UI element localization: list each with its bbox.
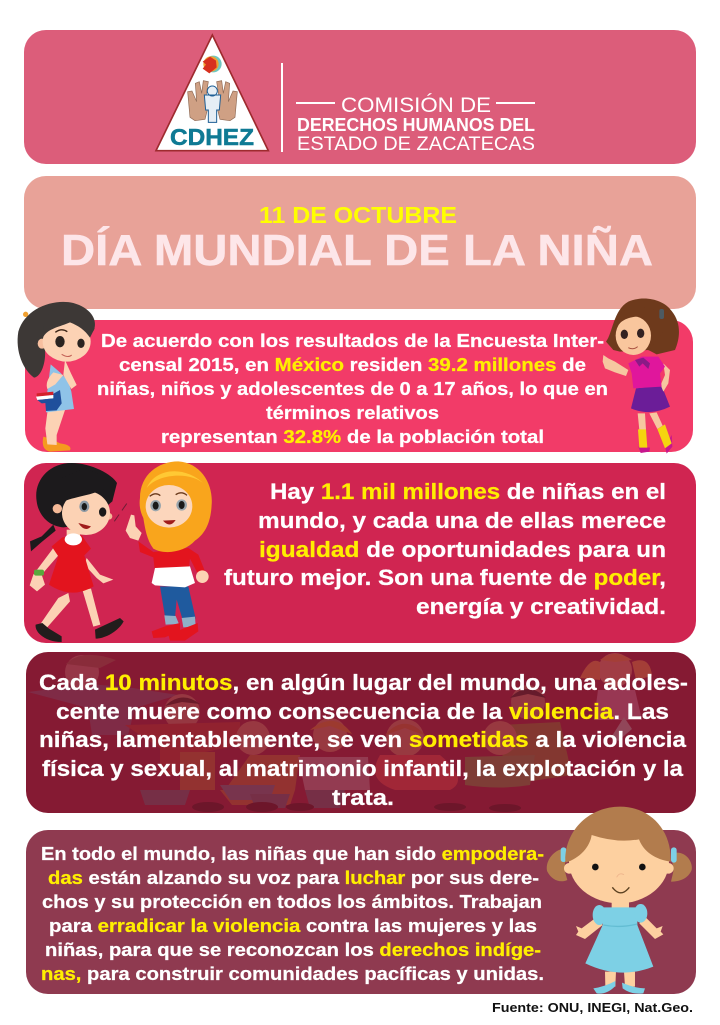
text block: violence: trata.	[332, 785, 394, 810]
panel: girls worldwide	[24, 461, 696, 643]
icon: CDHEZ triangle logo	[156, 35, 268, 151]
text block: girls worldwide: mundo, y cada una de ellas merece	[258, 508, 666, 533]
text block: violence: Cada 10 minutos , en algún lugar del mundo, una adoles-	[39, 670, 688, 695]
organization name: DERECHOS HUMANOS DEL	[297, 115, 535, 135]
text block: Mexico statistics	[97, 330, 608, 447]
icon: girl in blue dress	[547, 807, 692, 994]
text block: girls worldwide	[224, 479, 666, 619]
icon: girl with bag	[18, 302, 95, 452]
text block: violence: física y sexual, al matrimonio infantil, la explotación y la	[42, 756, 684, 781]
text block: violence: cente muere como consecuencia de la violencia . Las	[56, 699, 669, 724]
text block: girls worldwide: Hay 1.1 mil millones de niñas en el	[270, 479, 666, 504]
text block: Mexico statistics: representan 32.8% de la población total	[161, 426, 544, 447]
text block: empowered girls	[41, 843, 544, 984]
panel: title	[24, 176, 696, 309]
text block: girls worldwide: futuro mejor. Son una fuente de poder,	[224, 565, 666, 590]
text block: girls worldwide: energía y creatividad.	[416, 594, 666, 619]
organization name: ESTADO DE ZACATECAS	[297, 134, 535, 155]
logo wordmark: CDHEZ	[170, 124, 254, 150]
illustration: faded children background	[28, 653, 652, 812]
icon: girl in red dress	[30, 463, 128, 642]
icon: girl pointing	[603, 298, 679, 454]
date: 11 DE OCTUBRE	[259, 202, 457, 228]
text block: Mexico statistics: censal 2015, en México residen 39.2 millones de	[119, 354, 586, 375]
text block: empowered girls: das están alzando su voz para luchar por sus dere-	[48, 867, 539, 888]
text block: violence	[39, 670, 688, 810]
source note: Fuente: ONU, INEGI, Nat.Geo.	[492, 1000, 693, 1015]
text block: violence: niñas, lamentablemente, se ven sometidas a la violencia	[39, 727, 687, 752]
text block: empowered girls: En todo el mundo, las niñas que han sido empodera-	[41, 843, 544, 864]
text block: empowered girls: nas, para construir comunidades pacíficas y unidas.	[41, 963, 544, 984]
text block: Mexico statistics: niñas, niños y adolescentes de 0 a 17 años, lo que en	[97, 378, 608, 399]
text block: Mexico statistics: términos relativos	[266, 402, 439, 423]
organization name: COMISIÓN DE	[341, 94, 491, 117]
organization name	[297, 94, 535, 155]
text block: girls worldwide: igualdad de oportunidades para un	[259, 537, 666, 562]
panel: header with logo	[24, 30, 696, 164]
text block: Mexico statistics: De acuerdo con los resultados de la Encuesta Inter-	[101, 330, 604, 351]
icon: girl in orange hijab	[126, 461, 212, 641]
panel: Mexico statistics	[18, 298, 693, 454]
text block: empowered girls: niñas, para que se reconozcan los derechos indíge-	[45, 939, 541, 960]
panel: empowered girls	[26, 807, 696, 994]
panel: violence	[26, 652, 696, 813]
text block: empowered girls: para erradicar la violencia contra las mujeres y las	[49, 915, 537, 936]
title: DÍA MUNDIAL DE LA NIÑA	[61, 225, 653, 275]
text block: empowered girls: chos y su protección en todos los ámbitos. Trabajan	[42, 891, 542, 912]
